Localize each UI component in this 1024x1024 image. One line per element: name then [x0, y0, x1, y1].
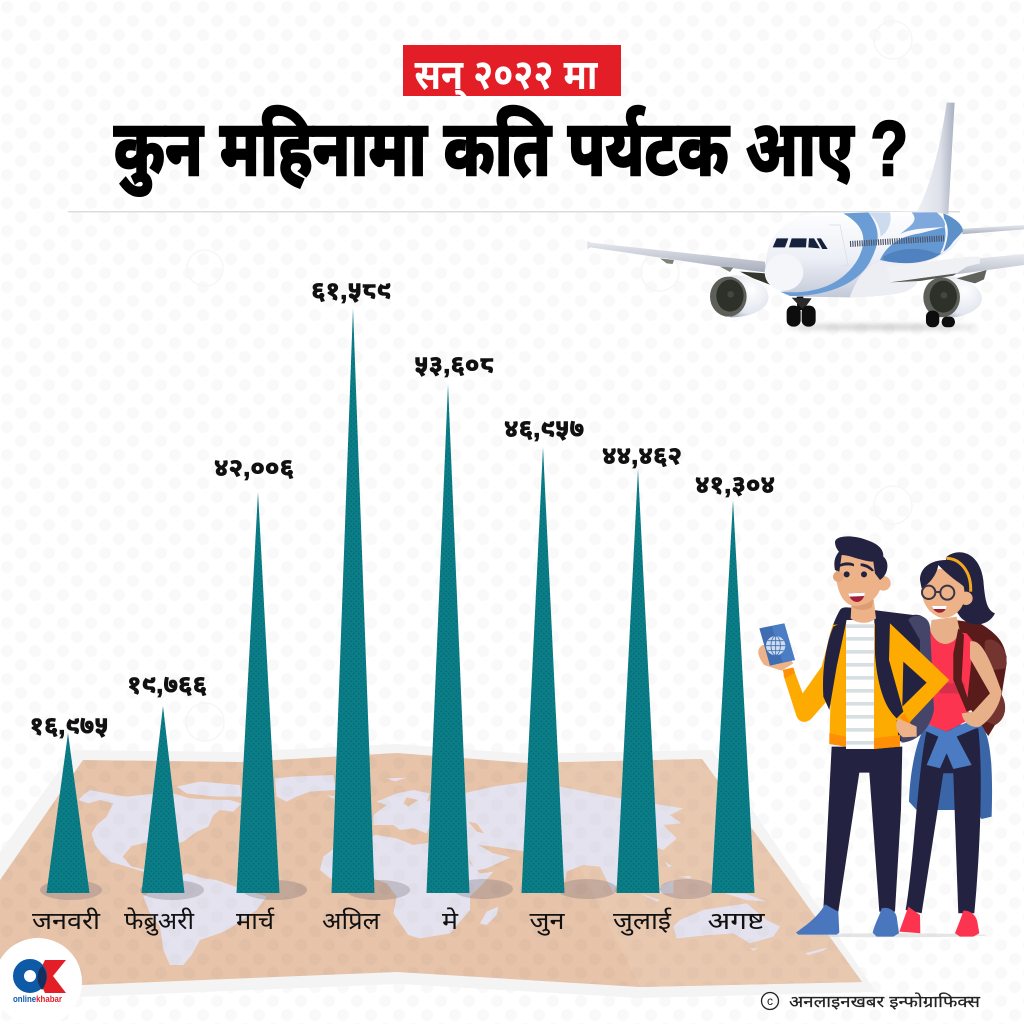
month labels: अप्रिल	[322, 907, 381, 935]
man's mouth	[848, 593, 865, 602]
man's head	[836, 550, 883, 606]
continents: australia and islands	[640, 862, 828, 955]
value labels	[30, 277, 775, 740]
credit line: अनलाइनखबर इन्फोग्राफिक्स	[789, 993, 981, 1011]
bar: February	[142, 706, 184, 893]
airplane right wing	[887, 254, 1024, 283]
month labels: फेब्रुअरी	[124, 907, 195, 936]
bar chart: tourist arrivals by month	[30, 277, 775, 936]
woman's glasses	[922, 586, 954, 600]
man's legs	[823, 747, 902, 912]
woman's hairband	[947, 558, 971, 592]
month labels: जुलाई	[613, 907, 672, 936]
man's shoes	[796, 904, 839, 935]
month labels: अगष्ट	[708, 908, 766, 935]
airplane fuselage	[766, 212, 963, 297]
woman's head	[922, 569, 965, 618]
man's hair	[834, 536, 887, 580]
woman's legs	[906, 728, 981, 913]
woman's hair back	[940, 552, 995, 624]
airplane rear landing gear	[926, 311, 955, 327]
bar: August	[712, 500, 754, 893]
continents: americas	[78, 775, 336, 965]
airplane ground shadow	[785, 324, 975, 330]
month labels: मार्च	[236, 907, 275, 935]
man's shirt	[846, 620, 874, 749]
month labels	[32, 907, 766, 936]
woman's fringe	[920, 560, 971, 592]
value labels: ४४,४६२	[602, 442, 682, 470]
woman's jacket knot	[923, 720, 980, 769]
month labels: जुन	[530, 908, 565, 936]
value labels: ४२,००६	[214, 454, 294, 482]
airplane tail fin	[917, 103, 955, 214]
woman	[906, 552, 1007, 913]
credit line: c	[767, 994, 773, 1008]
world map	[0, 744, 876, 998]
airplane right engine	[923, 276, 982, 318]
man's jacket	[783, 623, 846, 747]
airplane far stabiliser	[955, 225, 1024, 235]
bar shadows	[40, 879, 714, 900]
value labels: ५३,६०८	[414, 351, 494, 379]
airplane front landing gear	[787, 297, 816, 327]
man's straps	[875, 618, 903, 718]
logo: onlinekhabar	[0, 938, 82, 1024]
man's neck	[851, 597, 876, 623]
sub-heading: year badge: सन् २०२२ मा	[414, 51, 598, 100]
man's face	[839, 562, 874, 577]
bar: April	[332, 308, 374, 893]
bar: January	[46, 733, 90, 893]
continents: europe, asia, africa	[320, 778, 683, 938]
woman's arm	[962, 641, 1002, 727]
month labels: मे	[442, 907, 459, 935]
value labels: ४६,९५७	[504, 415, 584, 443]
woman's neck and chest	[930, 617, 960, 644]
airplane left wing	[587, 241, 767, 273]
airplane blue livery	[780, 212, 878, 296]
woman's strap	[953, 628, 972, 712]
airplane belly fairing	[850, 262, 920, 297]
woman's tied jacket	[909, 723, 992, 819]
credit line	[762, 992, 981, 1011]
bar: June	[522, 447, 564, 893]
title divider	[68, 211, 960, 212]
airplane left engine	[710, 275, 769, 317]
bar: May	[426, 384, 470, 893]
bar: March	[236, 492, 280, 893]
passport	[759, 623, 795, 666]
woman's top	[925, 628, 973, 732]
value labels: ६१,५८९	[311, 277, 391, 305]
value labels: ४१,३०४	[695, 471, 775, 499]
man	[758, 536, 979, 937]
foot shadow	[793, 933, 987, 937]
man's hands	[758, 645, 793, 671]
value labels: १६,९७५	[30, 712, 108, 740]
woman's mouth	[932, 606, 947, 613]
woman's backpack	[953, 620, 1007, 736]
airplane windows	[773, 238, 828, 249]
man's backpack	[823, 607, 933, 742]
travellers illustration	[758, 536, 1007, 937]
bar: July	[616, 469, 660, 893]
logo wordmark: onlinekhabar	[13, 994, 62, 1005]
month labels: जनवरी	[32, 907, 101, 935]
logo mark	[18, 960, 66, 993]
airplane illustration	[587, 103, 1024, 329]
value labels: १९,७६६	[127, 671, 207, 699]
